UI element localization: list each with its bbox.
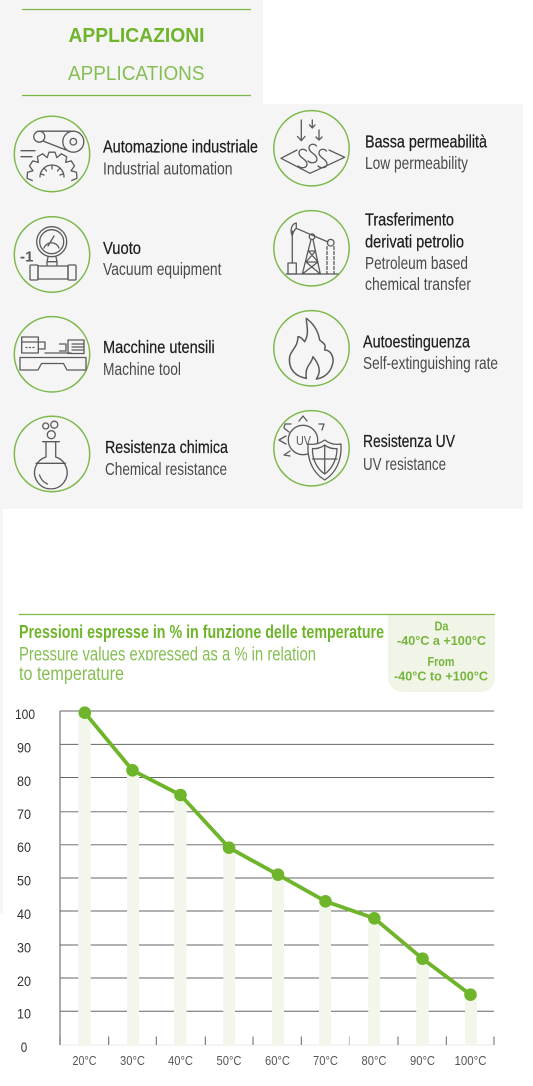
y axis labels: 30 (17, 940, 31, 956)
x axis labels: 50°C (216, 1053, 242, 1068)
chart title english: Pressure values expressed as a % in relation (19, 644, 316, 666)
temperature range badge: -40°C a +100°C (397, 633, 487, 648)
label: resistenza UV: Resistenza UV (363, 431, 455, 451)
y axis labels: 50 (17, 872, 31, 888)
icon: belt and gear (21, 131, 84, 180)
x axis labels (72, 1053, 486, 1068)
item: low permeability (274, 111, 487, 186)
label: machine tool: Machine tool (103, 359, 181, 379)
temperature range badge: From (428, 655, 454, 669)
label: vuoto: Vuoto (103, 238, 141, 258)
label: industrial automation: Industrial automation (103, 158, 232, 178)
y axis labels: 0 (21, 1039, 27, 1055)
data line (85, 713, 471, 995)
label: UV resistance: UV resistance (363, 454, 446, 474)
chart title english: to temperature (19, 664, 124, 685)
bars (78, 712, 477, 1045)
data points (78, 706, 477, 1001)
icon: sun and shield (279, 416, 341, 480)
y axis labels (15, 706, 35, 1055)
y axis labels: 20 (17, 973, 31, 989)
label: low permeability: Low permeability (365, 153, 468, 173)
icon: permeable surface (281, 120, 345, 173)
chart header (15, 614, 495, 692)
x axis labels: 80°C (362, 1053, 386, 1068)
temperature range badge (388, 615, 495, 692)
label: derivati petrolio: derivati petrolio (365, 232, 464, 252)
item: petroleum based chemical transfer (274, 210, 471, 294)
x axis labels: 40°C (168, 1053, 193, 1068)
y axis labels: 40 (17, 906, 31, 922)
x axis labels: 30°C (120, 1053, 145, 1068)
icon: oil pump (286, 223, 338, 274)
icon: flame (289, 318, 333, 379)
label: resistenza chimica: Resistenza chimica (105, 437, 228, 457)
temperature range badge: -40°C to +100°C (394, 668, 489, 684)
label: trasferimento: Trasferimento (365, 210, 454, 230)
chart title english (15, 644, 325, 685)
chart title italian: Pressioni espresse in % in funzione delle temperature (19, 621, 384, 642)
label: macchine utensili: Macchine utensili (103, 337, 215, 357)
y axis labels: 90 (17, 740, 31, 756)
x axis labels: 70°C (313, 1053, 338, 1068)
label: chemical transfer: chemical transfer (365, 274, 471, 294)
heading: applications: APPLICATIONS (68, 62, 204, 85)
item: self-extinguishing rate (274, 311, 498, 386)
x axis labels: 60°C (265, 1053, 290, 1068)
item: machine tool (14, 317, 215, 392)
icon label: UV: UV (296, 433, 311, 448)
x axis labels: 20°C (72, 1053, 96, 1068)
heading: applications (22, 10, 251, 96)
y axis labels: 70 (17, 806, 31, 822)
y axis labels: 80 (17, 773, 31, 789)
line chart (15, 706, 494, 1068)
item: UV resistance (274, 411, 455, 486)
y axis labels: 10 (17, 1006, 31, 1022)
label: bassa permeabilita: Bassa permeabilità (365, 132, 487, 152)
x axis labels: 90°C (410, 1053, 435, 1068)
label: autoestinguenza: Autoestinguenza (363, 332, 470, 352)
icon label: minus one: -1 (20, 248, 34, 266)
icon: lathe (20, 337, 86, 370)
item: chemical resistance (14, 416, 228, 492)
temperature range badge: Da (434, 620, 449, 634)
label: petroleum based: Petroleum based (365, 253, 468, 273)
y axis labels: 100 (15, 706, 35, 722)
x axis labels: 100°C (454, 1053, 486, 1068)
item: vacuum equipment (14, 217, 222, 292)
item: industrial automation (14, 116, 258, 192)
label: chemical resistance: Chemical resistance (105, 459, 227, 479)
label: self-extinguishing rate: Self-extinguishing rate (363, 353, 498, 373)
heading: applications: APPLICAZIONI (68, 24, 204, 47)
label: automazione industriale: Automazione industriale (103, 136, 258, 156)
label: vacuum equipment: Vacuum equipment (103, 259, 222, 279)
icon: flask (35, 421, 67, 489)
icon: pressure gauge (30, 227, 76, 280)
y axis labels: 60 (17, 839, 31, 855)
